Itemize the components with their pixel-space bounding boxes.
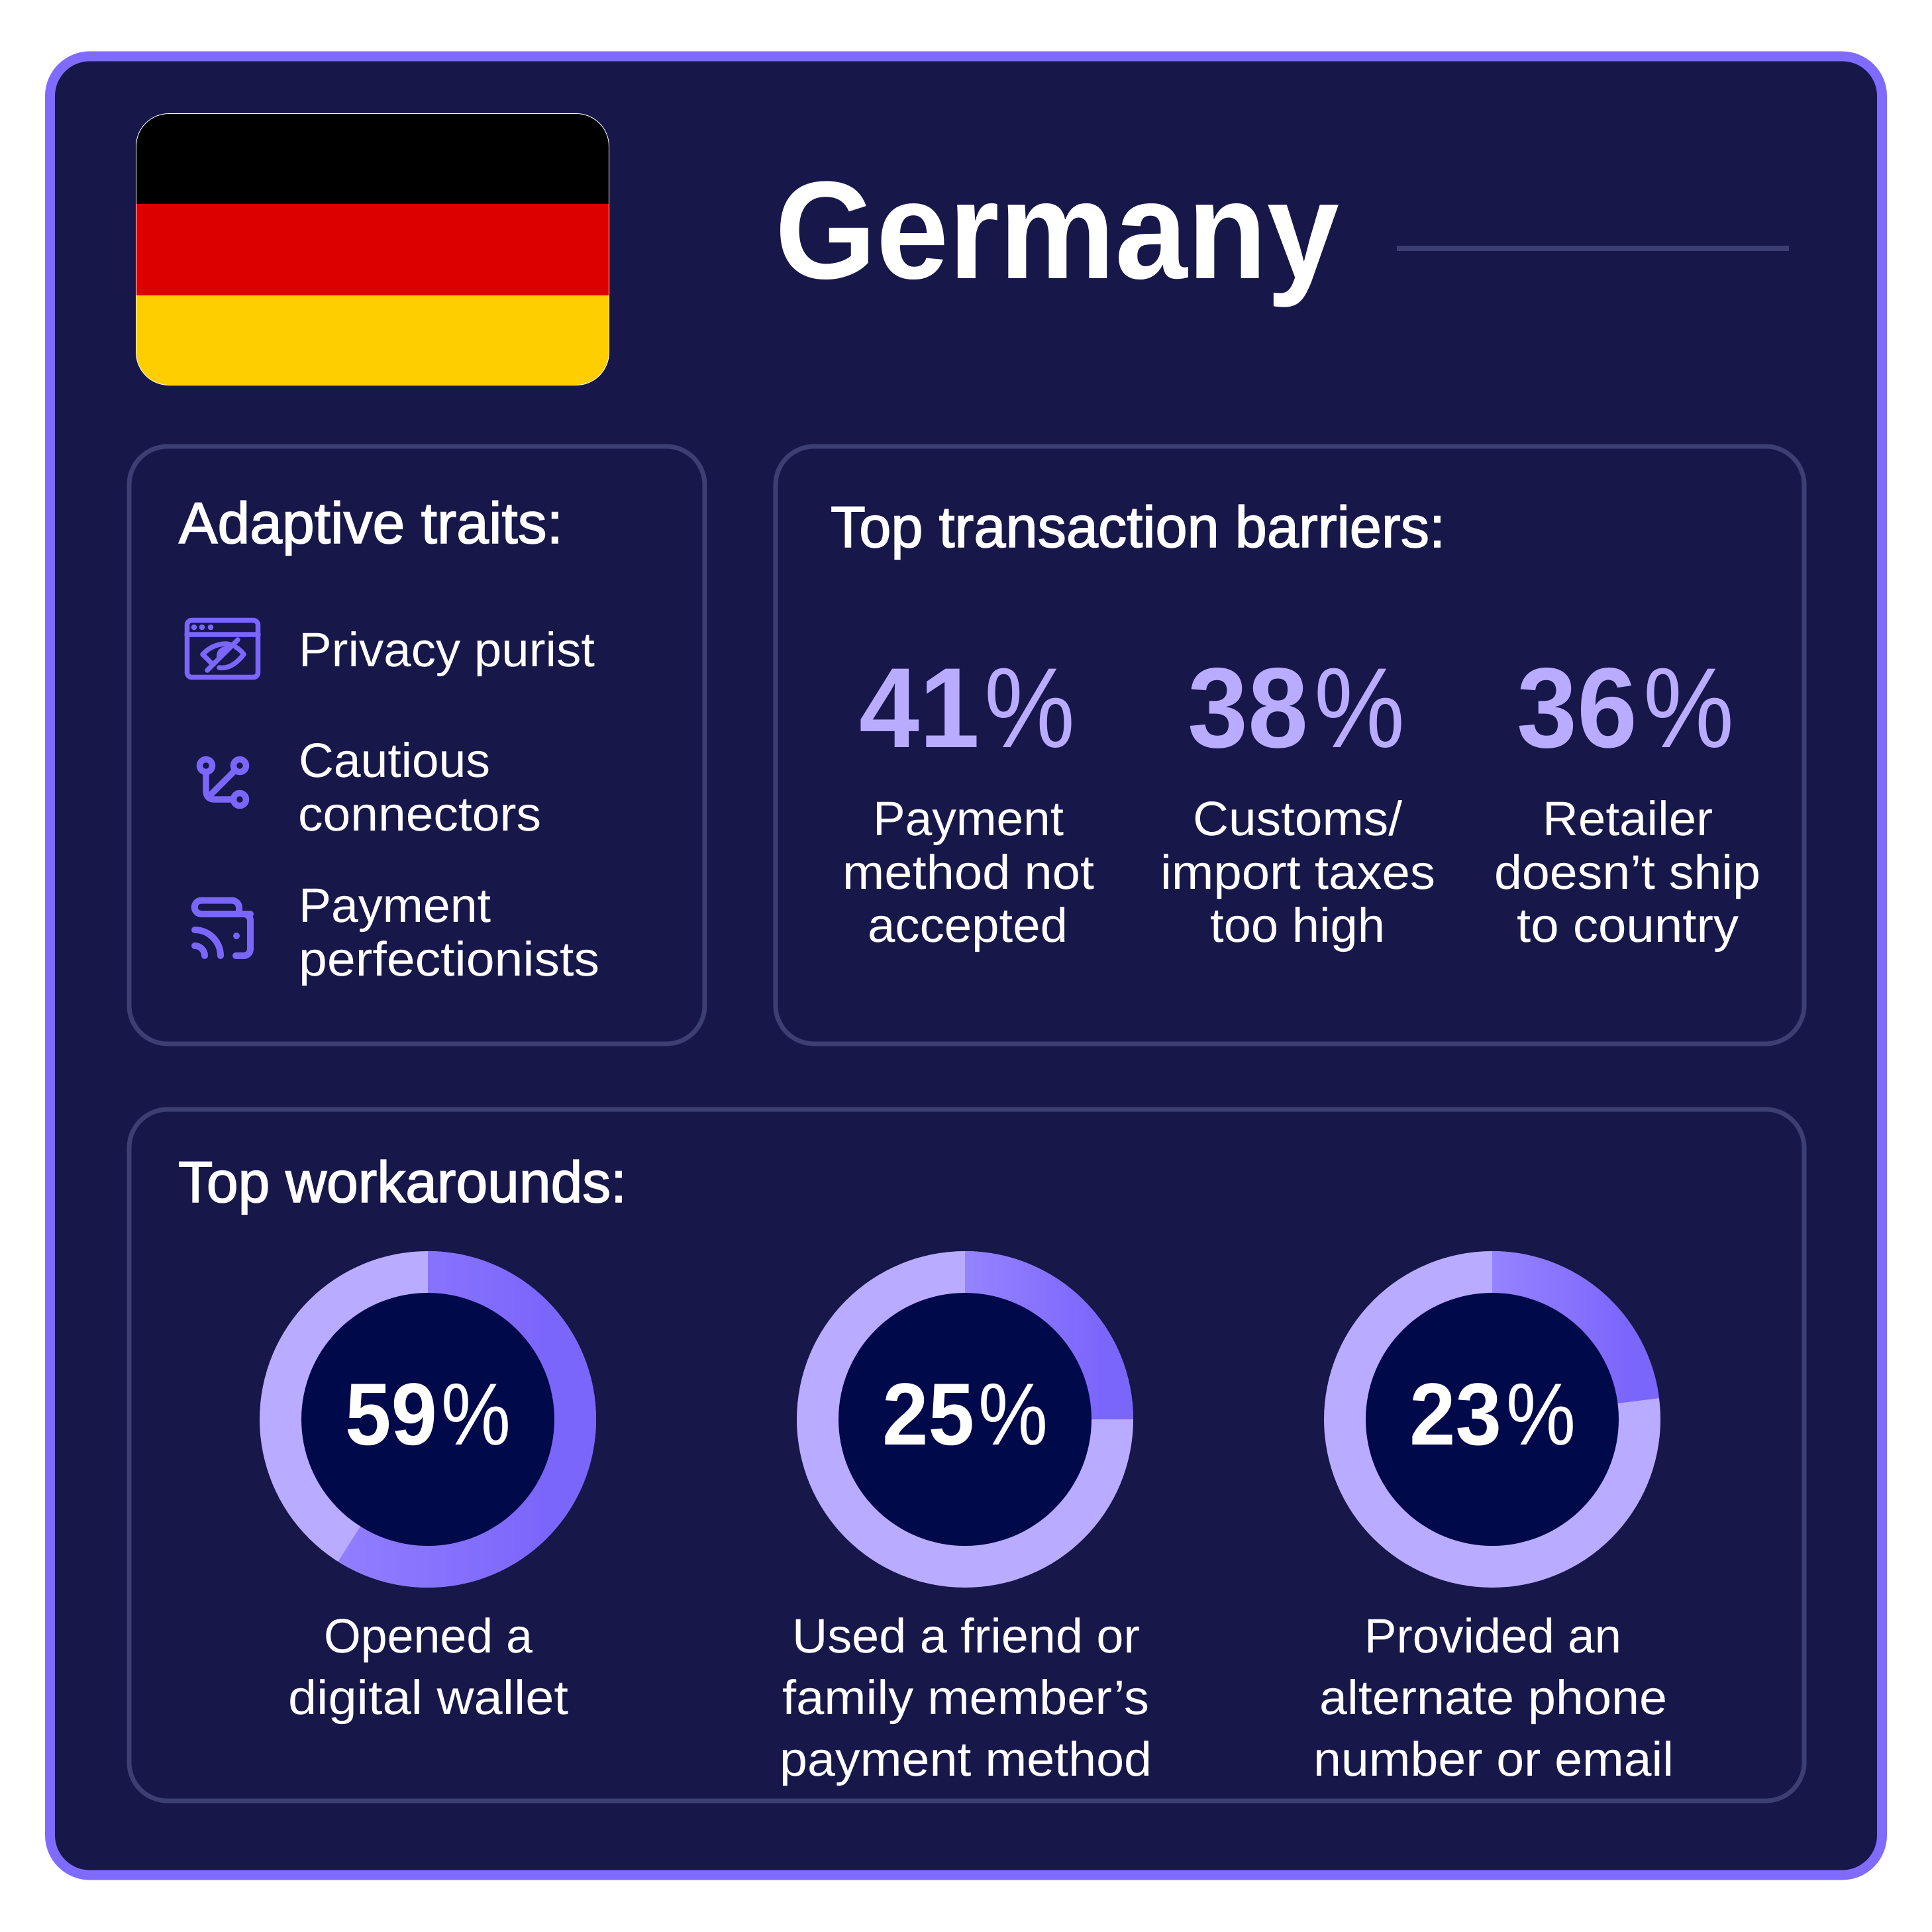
label: retailer doesn't ship to country: to country [1517,899,1739,952]
text: privacy purist: Privacy purist [299,623,595,677]
stat: 38 percent: 38 [1188,644,1308,772]
donut chart: 23 percent [1324,1251,1660,1588]
stat: 36 percent: 36 [1517,644,1637,772]
label: used a friend or family member's payment method: family member’s [782,1671,1149,1725]
label: opened a digital wallet: digital wallet [288,1671,568,1725]
donut chart: 25 percent [797,1251,1133,1588]
label: retailer doesn't ship to country: Retailer [1543,792,1713,846]
heading: top transaction barriers: Top transaction barriers: [831,494,1445,560]
panel: top transaction barriers [776,446,1804,1044]
stat: 38 percent: % [1314,644,1405,772]
donut chart: 59 percent: 59 [345,1366,437,1464]
text: payment perfectionists [299,879,599,986]
donut chart: 59 percent: % [441,1366,511,1464]
label: provided an alternate phone number or email: number or email [1313,1733,1674,1786]
stat: 38 percent [1188,644,1405,772]
label: used a friend or family member's payment method [780,1609,1152,1786]
label: opened a digital wallet: Opened a [324,1609,533,1663]
label: customs import taxes too high: import taxes [1160,846,1435,899]
panel: adaptive traits [129,446,705,1044]
label: opened a digital wallet [288,1609,568,1725]
text: cautious connectors [298,734,541,841]
donut chart: 25 percent: 25 [882,1366,974,1464]
text: payment perfectionists: perfectionists [299,933,599,986]
heading: adaptive traits: Adaptive traits: [179,490,563,556]
donut chart: 23 percent: 23 [1409,1366,1501,1464]
label: payment method not accepted: method not [842,846,1094,899]
icon: browser with hidden eye [187,620,258,677]
stat: 41 percent: 41 [859,644,980,772]
stat: 41 percent: % [984,644,1075,772]
title rule [1397,246,1789,251]
text: cautious connectors: Cautious [299,734,490,788]
label: customs import taxes too high: too high [1210,899,1385,952]
stat: 41 percent [859,644,1075,772]
label: used a friend or family member's payment method: Used a friend or [792,1609,1140,1663]
icon: wallet with contactless [195,901,250,956]
label: payment method not accepted [842,792,1094,952]
stat: 36 percent [1517,644,1734,772]
label: provided an alternate phone number or email [1313,1609,1674,1786]
donut chart: 25 percent: % [978,1366,1048,1464]
label: retailer doesn't ship to country: doesn’t ship [1494,846,1760,899]
icon: connected nodes [200,759,246,805]
label: customs import taxes too high [1160,792,1435,952]
title: Germany [775,152,1339,308]
flag: Germany [136,114,609,385]
panel: top workarounds [129,1109,1804,1801]
label: provided an alternate phone number or email: Provided an [1364,1609,1621,1663]
heading: top workarounds: Top workarounds: [178,1149,627,1215]
label: provided an alternate phone number or email: alternate phone [1319,1671,1667,1725]
text: payment perfectionists: Payment [299,879,491,933]
label: payment method not accepted: Payment [873,792,1064,846]
label: customs import taxes too high: Customs/ [1193,792,1403,846]
label: payment method not accepted: accepted [868,899,1068,952]
donut chart: 23 percent: % [1506,1366,1576,1464]
label: used a friend or family member's payment method: payment method [780,1733,1152,1786]
donut chart: 59 percent [260,1251,596,1588]
text: cautious connectors: connectors [298,788,541,841]
label: retailer doesn't ship to country [1494,792,1760,952]
stat: 36 percent: % [1643,644,1734,772]
